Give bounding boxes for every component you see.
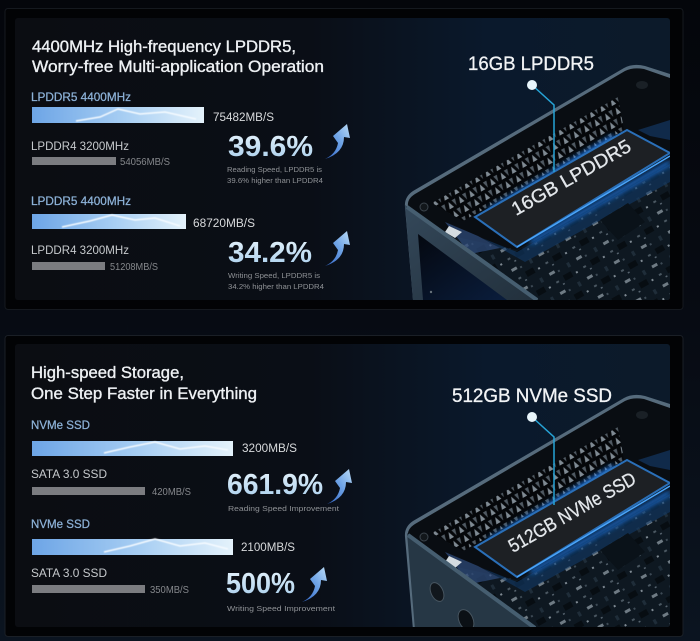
writing speed bars: 68720MB/S — [193, 218, 255, 230]
stat: writing speed 500%: Writing Speed Improvement — [227, 604, 336, 613]
writing speed bars: LPDDR5 4400MHz — [31, 194, 131, 208]
writing speed bars: SATA 3.0 SSD — [31, 566, 107, 580]
reading speed bars: LPDDR5 4400MHz — [31, 90, 131, 104]
heading — [32, 38, 324, 76]
reading speed bars: SATA 3.0 SSD — [31, 467, 107, 481]
callout: 512GB NVMe SSD: 512GB NVMe SSD — [452, 386, 612, 407]
writing speed bars — [31, 517, 295, 596]
stat: writing speed 34.2%: Writing Speed, LPDDR5 is — [228, 271, 320, 280]
stat: writing speed 34.2%: 34.2% higher than LPDDR4 — [228, 282, 324, 291]
heading: High-speed Storage, — [31, 364, 184, 382]
stat: reading speed 39.6%: 39.6% — [228, 131, 313, 163]
reading speed bars: 420MB/S — [152, 487, 191, 498]
callout: 16GB LPDDR5: 16GB LPDDR5 — [468, 54, 594, 75]
writing speed bars — [31, 194, 255, 273]
panel: LPDDR5 memory — [5, 8, 683, 310]
reading speed bars: LPDDR4 3200MHz — [31, 139, 129, 153]
panel: NVMe storage — [5, 336, 683, 636]
stat: writing speed 34.2% — [228, 231, 350, 291]
stat: reading speed 39.6%: Reading Speed, LPDDR5 is — [227, 165, 322, 174]
stat: writing speed 500%: 500% — [226, 568, 295, 600]
stat: reading speed 661.9%: 661.9% — [227, 469, 323, 501]
callout: 16GB LPDDR5 — [468, 54, 594, 172]
reading speed bars: 3200MB/S — [242, 443, 297, 455]
writing speed bars: NVMe SSD — [31, 517, 90, 531]
callout: 512GB NVMe SSD — [452, 386, 612, 505]
heading: Worry-free Multi-application Operation — [32, 58, 324, 76]
stat: reading speed 39.6%: 39.6% higher than LPDDR4 — [227, 176, 323, 185]
stat: reading speed 661.9%: Reading Speed Improvement — [228, 504, 340, 513]
device illustration: storage — [405, 395, 670, 633]
writing speed bars: 51208MB/S — [110, 262, 158, 273]
heading: 4400MHz High-frequency LPDDR5, — [32, 38, 296, 56]
stat: writing speed 34.2%: 34.2% — [228, 237, 312, 269]
heading — [31, 364, 257, 403]
stat: reading speed 661.9% — [227, 469, 352, 513]
writing speed bars: 350MB/S — [150, 585, 189, 596]
device illustration: memory: 16GB LPDDR5 — [508, 136, 635, 220]
reading speed bars — [31, 90, 274, 168]
device illustration: storage: 512GB NVMe SSD — [505, 469, 640, 557]
writing speed bars: LPDDR4 3200MHz — [31, 243, 129, 257]
stat: writing speed 500% — [226, 567, 336, 613]
reading speed bars: 54056MB/S — [120, 157, 170, 168]
writing speed bars: 2100MB/S — [241, 542, 295, 554]
device illustration: memory — [405, 65, 670, 300]
reading speed bars: 75482MB/S — [213, 112, 274, 124]
heading: One Step Faster in Everything — [31, 385, 257, 403]
stat: reading speed 39.6% — [227, 124, 350, 185]
reading speed bars — [31, 418, 297, 498]
reading speed bars: NVMe SSD — [31, 418, 90, 432]
